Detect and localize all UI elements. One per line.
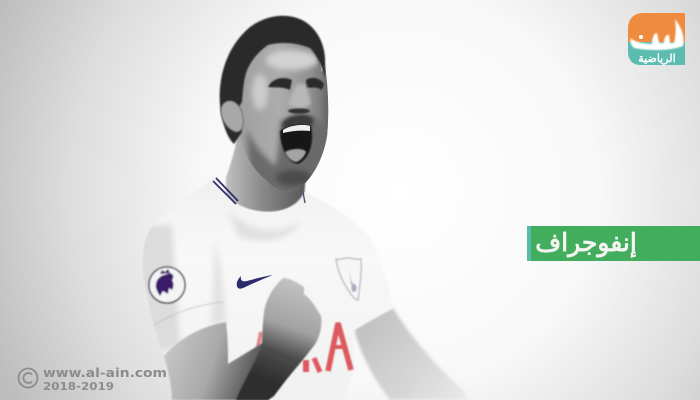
neck bbox=[226, 130, 306, 212]
chin stubble bbox=[276, 170, 312, 186]
years: 2018-2019 bbox=[43, 381, 114, 393]
sleeve shadow bbox=[210, 240, 226, 325]
right face shadow bbox=[324, 78, 328, 145]
watermark bbox=[18, 366, 167, 393]
sleeve hem bbox=[154, 302, 224, 325]
head bbox=[220, 16, 334, 200]
beard bbox=[246, 116, 330, 200]
banner title: إنفوجراف bbox=[535, 229, 637, 258]
shirt shadow bbox=[228, 210, 300, 241]
right arm bbox=[353, 308, 468, 400]
nose bbox=[288, 84, 311, 110]
banner teal edge bbox=[527, 226, 531, 261]
collar stripes bbox=[213, 178, 238, 204]
banner green bar bbox=[527, 226, 700, 261]
hair bbox=[220, 16, 325, 144]
spurs crest bbox=[336, 258, 361, 300]
logo subtitle: الرياضية bbox=[638, 53, 676, 65]
face shading bbox=[246, 48, 334, 200]
mustache bbox=[282, 115, 313, 128]
left sleeve tone bbox=[140, 225, 180, 360]
left arm bbox=[164, 322, 290, 400]
clenched fist bbox=[236, 278, 321, 400]
nose underside bbox=[288, 108, 310, 114]
website address: www.al-ain.com bbox=[43, 366, 167, 380]
banner: infographic bbox=[527, 226, 700, 261]
left eyebrow and eye bbox=[268, 78, 292, 90]
right eyebrow and eye bbox=[306, 78, 324, 90]
face bbox=[238, 37, 328, 191]
premier league badge bbox=[149, 267, 185, 303]
sleeve shade bbox=[140, 225, 180, 360]
jersey bbox=[143, 180, 392, 354]
player photo bbox=[140, 16, 468, 400]
collar right tip bbox=[303, 192, 305, 203]
ear bbox=[221, 101, 243, 132]
copyright icon bbox=[18, 368, 38, 388]
logo dot bbox=[639, 35, 643, 39]
forehead highlight bbox=[266, 50, 318, 70]
nike swoosh bbox=[237, 275, 273, 289]
teeth bbox=[283, 125, 310, 133]
logo orange block bbox=[628, 13, 685, 50]
cheek highlight bbox=[252, 74, 268, 110]
logo teal block bbox=[628, 42, 685, 65]
logo: al-ain sports bbox=[628, 13, 685, 65]
open mouth bbox=[280, 125, 312, 164]
temple highlight bbox=[319, 60, 325, 72]
logo white calligraphy bbox=[630, 19, 684, 50]
sponsor letters bbox=[258, 323, 351, 372]
tongue bbox=[285, 149, 306, 162]
